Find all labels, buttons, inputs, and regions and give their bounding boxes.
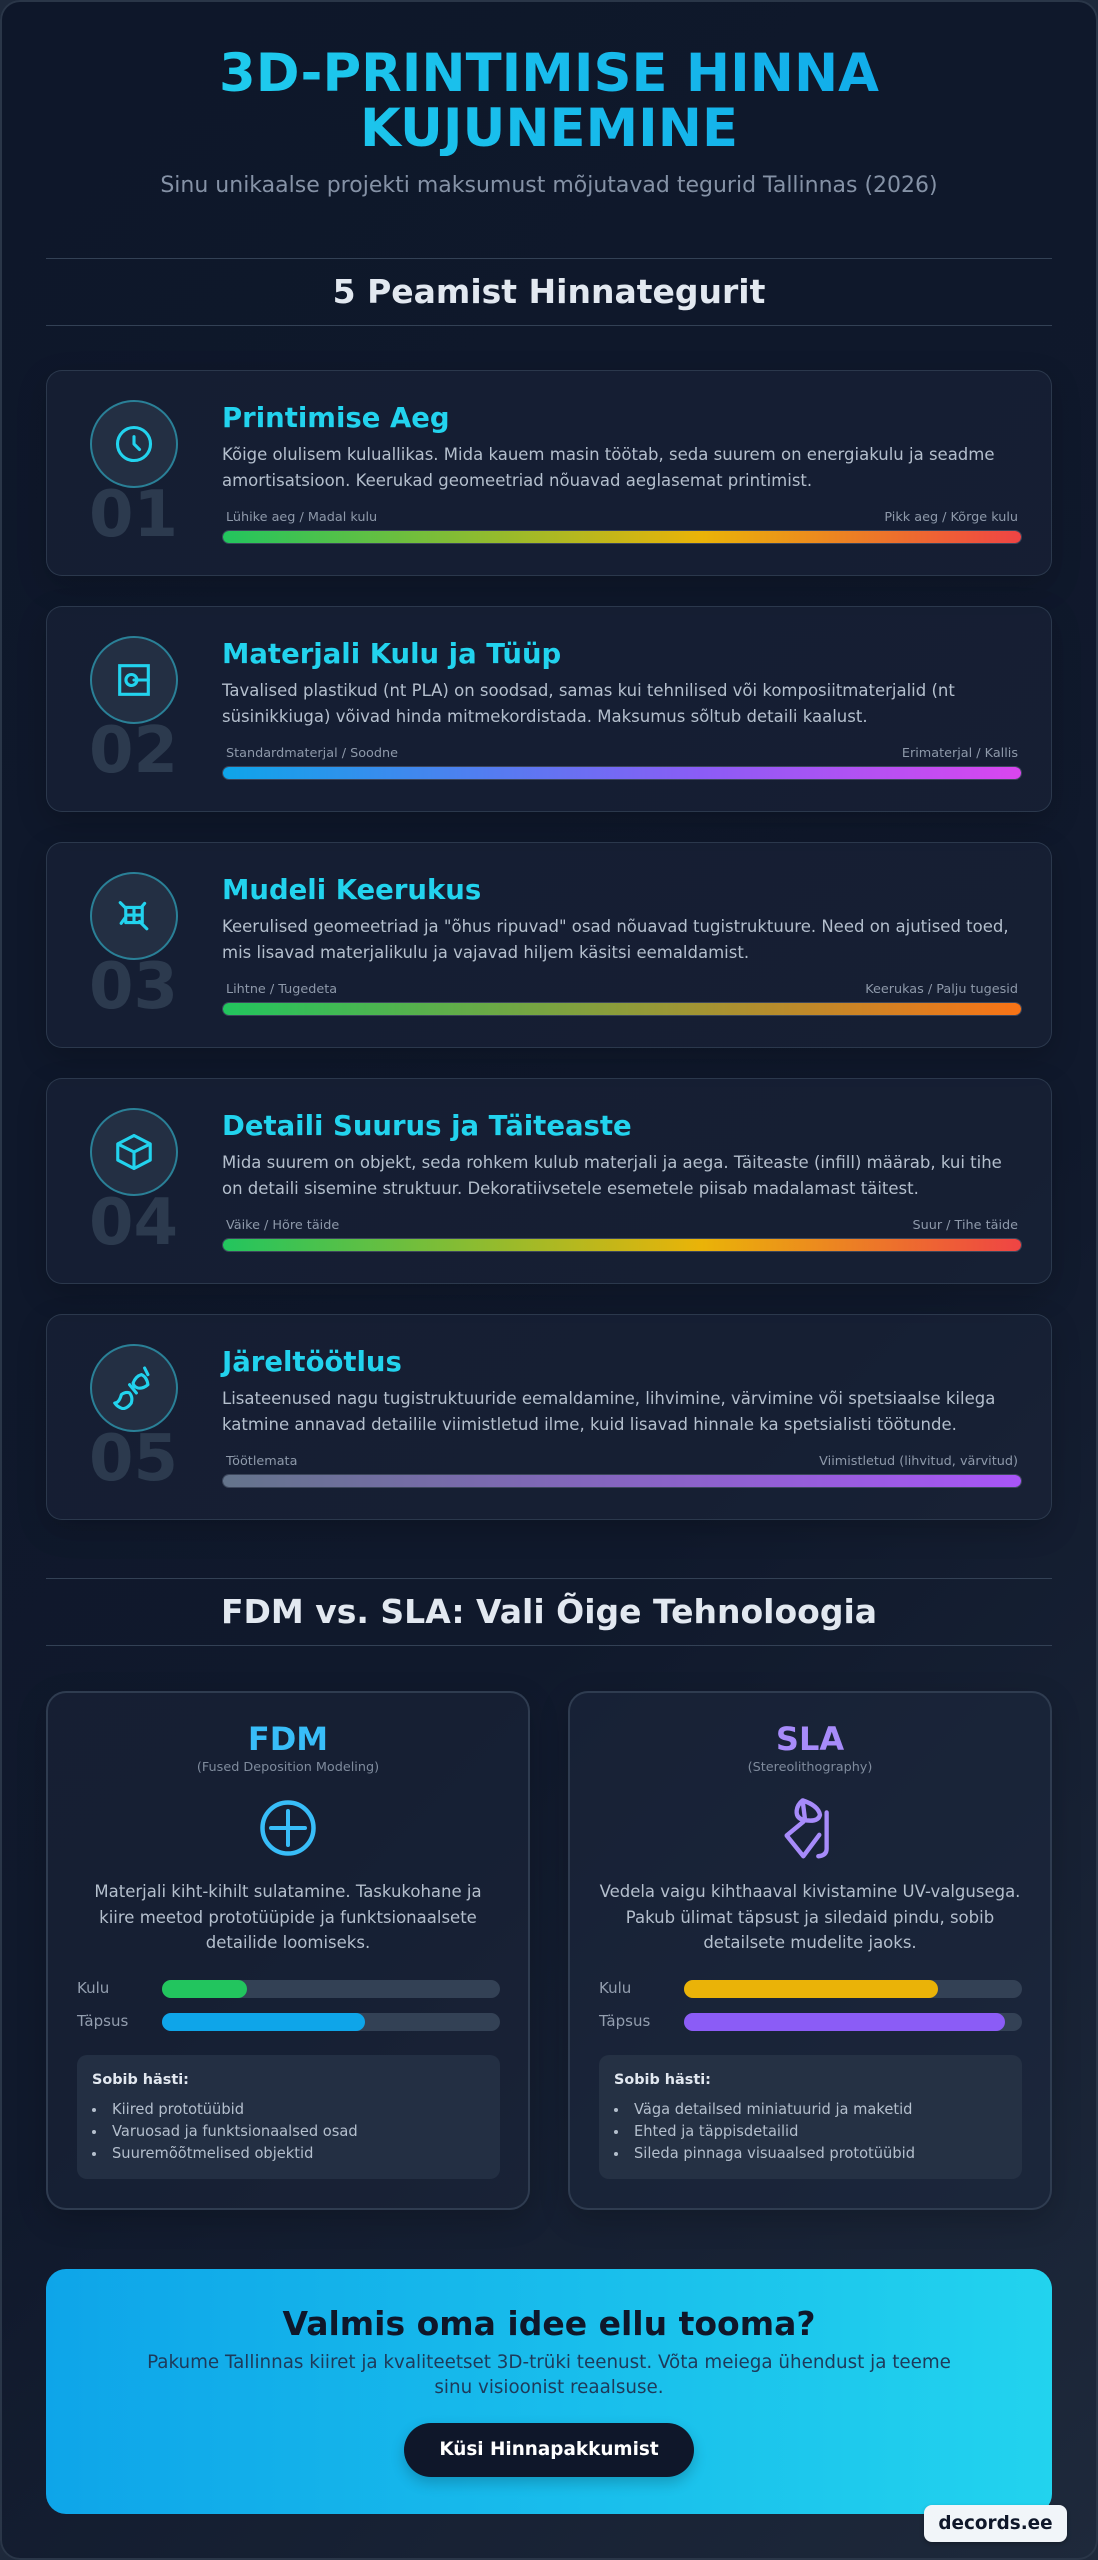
factor title: Detaili Suurus ja Täiteaste: [222, 1110, 632, 1142]
factor description: [222, 445, 995, 490]
suitability box: [599, 2055, 1022, 2179]
number 04: 04: [89, 1186, 178, 1260]
icon: SLA resin drop: [784, 1798, 829, 1858]
SLA description: [600, 1882, 1020, 1952]
scale label high: Viimistletud (lihvitud, värvitud): [819, 1454, 1018, 1469]
suitability list: Suuremõõtmelised objektid: [112, 2145, 313, 2162]
gradient scale bar: [223, 1239, 1021, 1251]
factor description: Tavalised plastikud (nt PLA) on soodsad, samas kui tehnilised või komposiitmaterjalid (nt: [222, 681, 955, 700]
CTA button: Küsi Hinnapakkumist: [439, 2439, 659, 2460]
subtitle: Sinu unikaalse projekti maksumust mõjutavad tegurid Tallinnas (2026): [160, 173, 938, 198]
gradient scale bar: [223, 531, 1021, 543]
factor description: Keerulised geomeetriad ja "õhus ripuvad" osad nõuavad tugistruktuure. Need on ajutised toed,: [222, 917, 1009, 936]
suitability list: Varuosad ja funktsionaalsed osad: [112, 2123, 358, 2140]
SLA description: Pakub ülimat täpsust ja siledaid pindu, sobib: [626, 1908, 994, 1927]
factor description: Mida suurem on objekt, seda rohkem kulub materjali ja aega. Täiteaste (infill) määrab, kui tihe: [222, 1153, 1002, 1172]
metric label: cost: Kulu: [77, 1979, 109, 1997]
factor description: [222, 1153, 1002, 1198]
heading: 5 main price factors: 5 Peamist Hinnategurit: [333, 272, 765, 311]
SLA title: SLA: [776, 1720, 844, 1758]
factor title: Materjali Kulu ja Tüüp: [222, 638, 561, 670]
FDM description: detailide loomiseks.: [206, 1933, 370, 1952]
scale label high: Keerukas / Palju tugesid: [865, 982, 1018, 997]
CTA button: [404, 2423, 694, 2477]
metric label: cost: Kulu: [599, 1979, 631, 1997]
icon: brush: [90, 1344, 178, 1432]
number 01: 01: [89, 478, 178, 552]
icon: cube: [90, 1108, 178, 1196]
scale label low: Töötlemata: [226, 1454, 297, 1469]
panel: FDM comparison: [46, 1691, 530, 2210]
factor description: [222, 1389, 995, 1434]
number 03: 03: [89, 950, 178, 1024]
scale label low: Väike / Hõre täide: [226, 1218, 339, 1233]
metric bar: precision 60%: [162, 2013, 500, 2031]
suitability list: [92, 2101, 358, 2162]
panel: SLA comparison: [568, 1691, 1052, 2210]
title: KUJUNEMINE: [360, 98, 738, 159]
panel: factor 03 complexity: [46, 842, 1052, 1048]
panel: factor 04 size and infill: [46, 1078, 1052, 1284]
panel: factor 01 printing time: [46, 370, 1052, 576]
suitability list: Ehted ja täppisdetailid: [634, 2123, 798, 2140]
scale label low: Lihtne / Tugedeta: [226, 982, 337, 997]
title: [46, 46, 1052, 156]
brand badge: decords.ee: [938, 2513, 1053, 2534]
icon: material spool: [90, 636, 178, 724]
factor description: on detaili sisemine struktuur. Dekoratiivsetele esemetele piisab madalamast täitest.: [222, 1178, 919, 1198]
icon: support structure: [90, 872, 178, 960]
scale label low: Standardmaterjal / Soodne: [226, 746, 398, 761]
FDM title: FDM: [248, 1720, 328, 1758]
suitability list: Kiired prototüübid: [112, 2101, 244, 2118]
gradient scale bar: [223, 1475, 1021, 1487]
metric label: precision: Täpsus: [599, 2012, 650, 2030]
factor description: süsinikkiuga) võivad hinda mitmekordistada. Maksumus sõltub detaili kaalust.: [222, 706, 868, 726]
brand badge: [924, 2505, 1067, 2542]
scale label high: Pikk aeg / Kõrge kulu: [884, 510, 1018, 525]
factor description: katmine annavad detailile viimistletud ilme, kuid lisavad hinnale ka spetsialisti töötunde.: [222, 1414, 957, 1434]
icon: FDM nozzle crosshair: [260, 1800, 316, 1856]
number 02: 02: [89, 714, 178, 788]
number 05: 05: [89, 1422, 178, 1496]
metric bar: precision 95%: [684, 2013, 1022, 2031]
suitability list: Sileda pinnaga visuaalsed prototüübid: [634, 2145, 915, 2162]
suitability heading: Sobib hästi:: [92, 2072, 189, 2088]
suitability heading: Sobib hästi:: [614, 2072, 711, 2088]
suitability box: [77, 2055, 500, 2179]
metric bar: cost 25%: [162, 1980, 500, 1998]
panel: call to action: [46, 2269, 1052, 2514]
suitability list: [614, 2101, 915, 2162]
factor title: Mudeli Keerukus: [222, 874, 481, 906]
FDM description: [94, 1882, 482, 1952]
gradient scale bar: [223, 1003, 1021, 1015]
heading: FDM vs SLA: FDM vs. SLA: Vali Õige Tehnoloogia: [221, 1592, 877, 1631]
metric bar: cost 75%: [684, 1980, 1022, 1998]
gradient scale bar: [223, 767, 1021, 779]
factor description: [222, 917, 1009, 962]
factor description: [222, 681, 955, 726]
title: 3D-PRINTIMISE HINNA: [219, 43, 879, 104]
CTA text: [147, 2352, 951, 2398]
CTA text: Pakume Tallinnas kiiret ja kvaliteetset 3D-trüki teenust. Võta meiega ühendust ja teeme: [147, 2352, 951, 2373]
scale label high: Erimaterjal / Kallis: [902, 746, 1018, 761]
SLA description: detailsete mudelite jaoks.: [703, 1933, 917, 1952]
SLA full name: (Stereolithography): [748, 1760, 872, 1775]
panel: factor 02 material: [46, 606, 1052, 812]
factor description: Lisateenused nagu tugistruktuuride eemaldamine, lihvimine, värvimine või spetsiaalse kilega: [222, 1389, 995, 1408]
CTA heading: Valmis oma idee ellu tooma?: [282, 2304, 816, 2343]
metric label: precision: Täpsus: [77, 2012, 128, 2030]
FDM description: Materjali kiht-kihilt sulatamine. Taskukohane ja: [94, 1882, 482, 1901]
scale label high: Suur / Tihe täide: [912, 1218, 1018, 1233]
scale label low: Lühike aeg / Madal kulu: [226, 510, 377, 525]
SLA description: Vedela vaigu kihthaaval kivistamine UV-valgusega.: [600, 1882, 1020, 1901]
panel: factor 05 post-processing: [46, 1314, 1052, 1520]
suitability list: Väga detailsed miniatuurid ja maketid: [634, 2101, 912, 2118]
factor description: amortisatsioon. Keerukad geomeetriad nõuavad aeglasemat printimist.: [222, 470, 812, 490]
factor title: Järeltöötlus: [222, 1346, 402, 1378]
factor title: Printimise Aeg: [222, 402, 450, 434]
CTA text: sinu visioonist reaalsuse.: [434, 2377, 664, 2398]
factor description: mis lisavad materjalikulu ja vajavad hiljem käsitsi eemaldamist.: [222, 942, 749, 962]
FDM full name: (Fused Deposition Modeling): [197, 1760, 379, 1775]
FDM description: kiire meetod prototüüpide ja funktsionaalsete: [99, 1908, 477, 1927]
icon: clock: [90, 400, 178, 488]
factor description: Kõige olulisem kuluallikas. Mida kauem masin töötab, seda suurem on energiakulu ja seadme: [222, 445, 995, 464]
